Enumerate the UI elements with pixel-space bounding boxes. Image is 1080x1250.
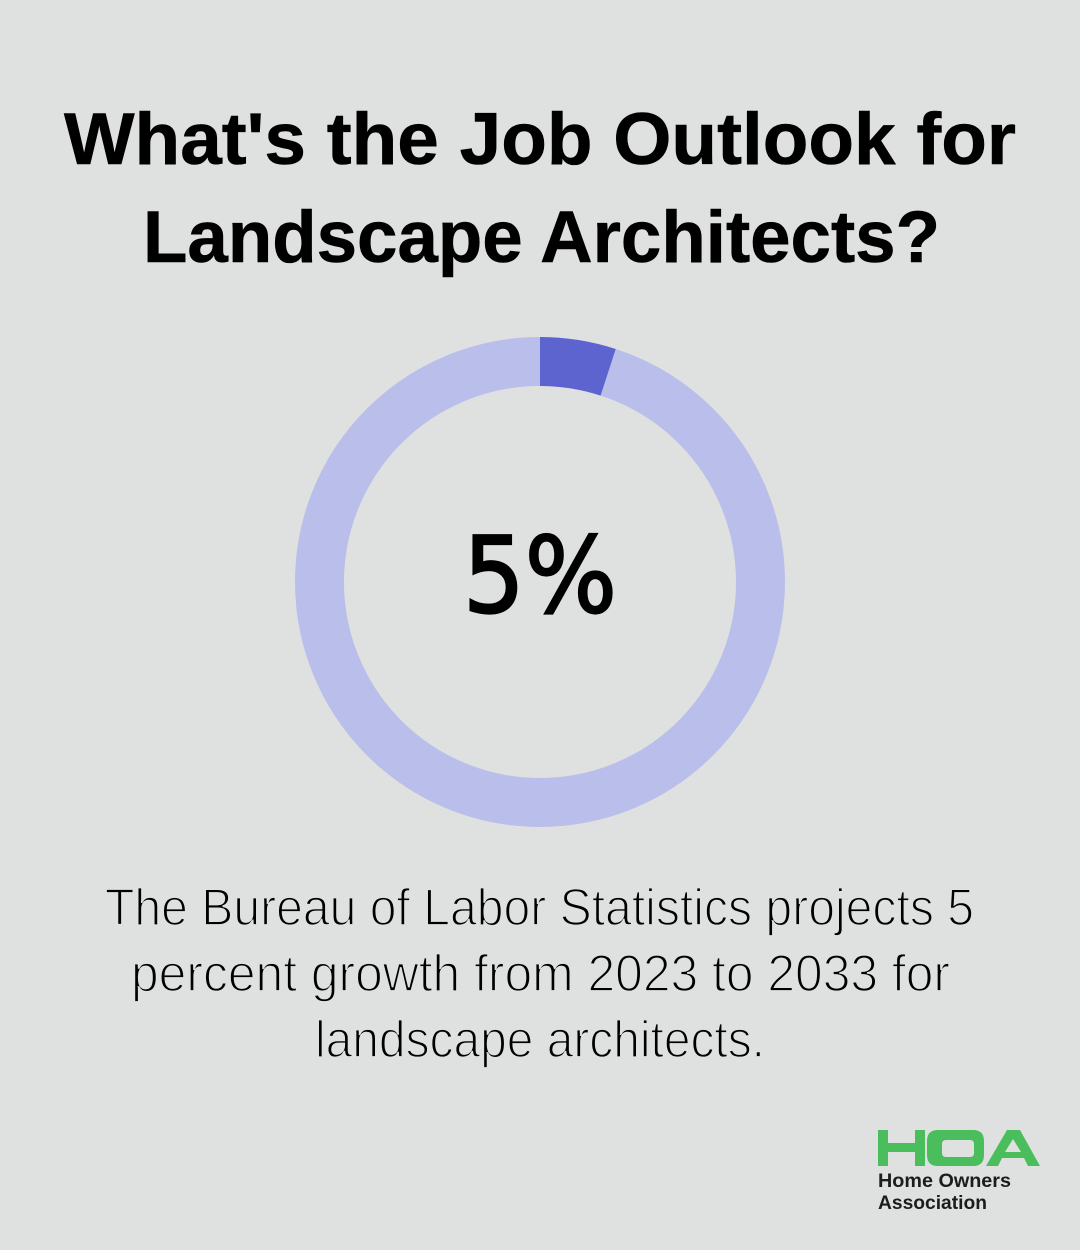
logo text: Home Owners bbox=[878, 1170, 1011, 1192]
center value: 5% bbox=[463, 515, 617, 637]
description text bbox=[105, 879, 974, 1069]
description text: The Bureau of Labor Statistics projects 5 bbox=[105, 879, 974, 937]
description text: percent growth from 2023 to 2033 for bbox=[131, 945, 950, 1003]
highlighted segment: 5 percent bbox=[540, 337, 616, 396]
logo: Home Owners Association bbox=[878, 1130, 1040, 1214]
donut chart bbox=[320, 337, 760, 802]
description text: landscape architects. bbox=[315, 1011, 765, 1069]
title: What's the Job Outlook for bbox=[64, 99, 1016, 180]
title bbox=[64, 99, 1016, 278]
logo text bbox=[878, 1170, 1011, 1214]
title: Landscape Architects? bbox=[143, 197, 940, 278]
logo mark: HOA bbox=[878, 1130, 1040, 1166]
logo text: Association bbox=[878, 1192, 987, 1214]
